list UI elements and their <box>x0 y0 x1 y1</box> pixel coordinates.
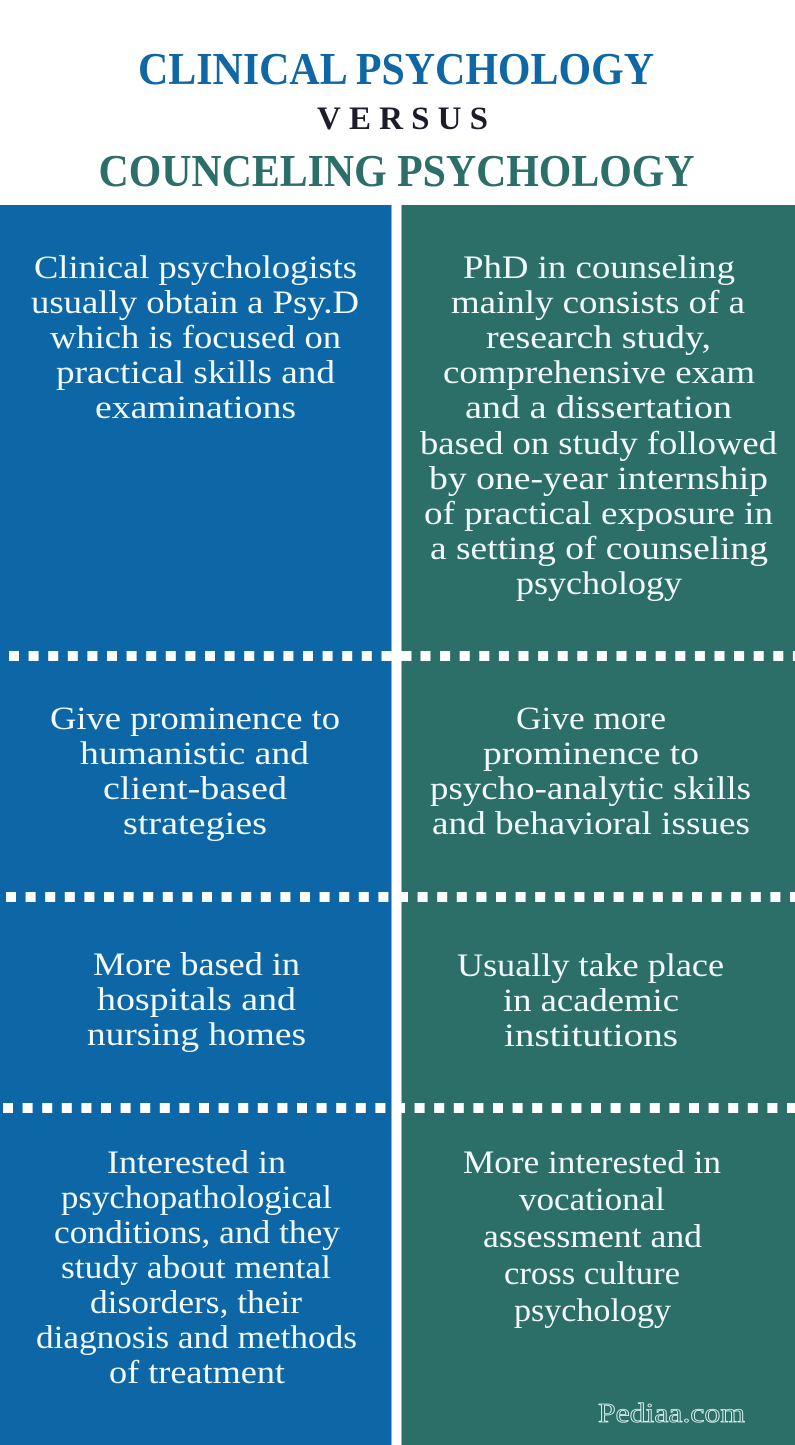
title: counceling psychology: COUNCELING PSYCHOLOGY <box>98 145 694 196</box>
text: clinical strategies: client-based <box>103 771 288 807</box>
text: counseling degree: PhD in counseling <box>463 250 735 286</box>
text: clinical strategies <box>50 701 340 842</box>
text: clinical interests: disorders, their <box>90 1285 302 1321</box>
text: clinical interests: diagnosis and methods <box>36 1320 357 1356</box>
text: counseling interests <box>463 1145 721 1329</box>
panel: counceling psychology column <box>402 205 795 1445</box>
text: counseling degree: by one-year internship <box>429 461 768 497</box>
text: clinical degree: Clinical psychologists <box>34 250 357 286</box>
text: clinical interests: study about mental <box>61 1250 331 1286</box>
text: clinical workplace <box>87 947 306 1053</box>
text: clinical degree: practical skills and <box>56 355 336 391</box>
text: counseling degree: and a dissertation <box>465 390 732 426</box>
text: counseling degree: based on study followed <box>420 426 778 462</box>
text: counseling workplace: Usually take place <box>457 948 724 984</box>
text: counseling interests: assessment and <box>483 1219 703 1255</box>
text: clinical degree: which is focused on <box>50 320 341 356</box>
text: counseling skills: psycho-analytic skills <box>430 771 751 807</box>
text: clinical interests: conditions, and they <box>54 1215 341 1251</box>
text: counseling skills: prominence to <box>483 736 699 772</box>
text: clinical interests: of treatment <box>109 1355 285 1391</box>
text: clinical workplace: hospitals and <box>97 982 297 1018</box>
text: clinical interests: Interested in <box>107 1145 286 1181</box>
text: counseling workplace: in academic <box>503 983 679 1019</box>
text: counseling workplace <box>457 948 724 1054</box>
text: counseling skills: and behavioral issues <box>432 806 750 842</box>
text: counseling degree: comprehensive exam <box>443 355 755 391</box>
text: counseling skills <box>430 701 751 842</box>
text: clinical workplace: More based in <box>93 947 300 983</box>
text: clinical degree: examinations <box>95 390 296 426</box>
text: counseling degree: psychology <box>516 566 683 602</box>
text: counseling skills: Give more <box>516 701 666 737</box>
text: clinical degree <box>31 250 359 426</box>
text: counseling interests: psychology <box>514 1293 672 1329</box>
title: clinical psychology: CLINICAL PSYCHOLOGY <box>138 43 654 94</box>
text: clinical interests: psychopathological <box>61 1180 332 1216</box>
text: counseling degree: of practical exposure in <box>424 496 773 532</box>
heading: versus: VERSUS <box>317 101 488 137</box>
text: clinical strategies: humanistic and <box>80 736 310 772</box>
text: counseling degree: mainly consists of a <box>451 285 745 321</box>
text: counseling interests: vocational <box>519 1182 665 1218</box>
text: counseling interests: More interested in <box>463 1145 721 1181</box>
text: counseling interests: cross culture <box>504 1256 680 1292</box>
panel: clinical psychology column <box>0 205 392 1445</box>
text: counseling workplace: institutions <box>504 1018 678 1054</box>
logo: Pediaa.com: Pediaa.com <box>598 1398 745 1428</box>
text: counseling degree: research study, <box>486 320 711 356</box>
text: counseling degree <box>420 250 778 602</box>
text: clinical workplace: nursing homes <box>87 1017 306 1053</box>
text: clinical strategies: strategies <box>123 806 267 842</box>
text: clinical interests <box>36 1145 357 1391</box>
text: clinical strategies: Give prominence to <box>50 701 340 737</box>
text: clinical degree: usually obtain a Psy.D <box>31 285 359 321</box>
text: counseling degree: a setting of counseling <box>430 531 768 567</box>
